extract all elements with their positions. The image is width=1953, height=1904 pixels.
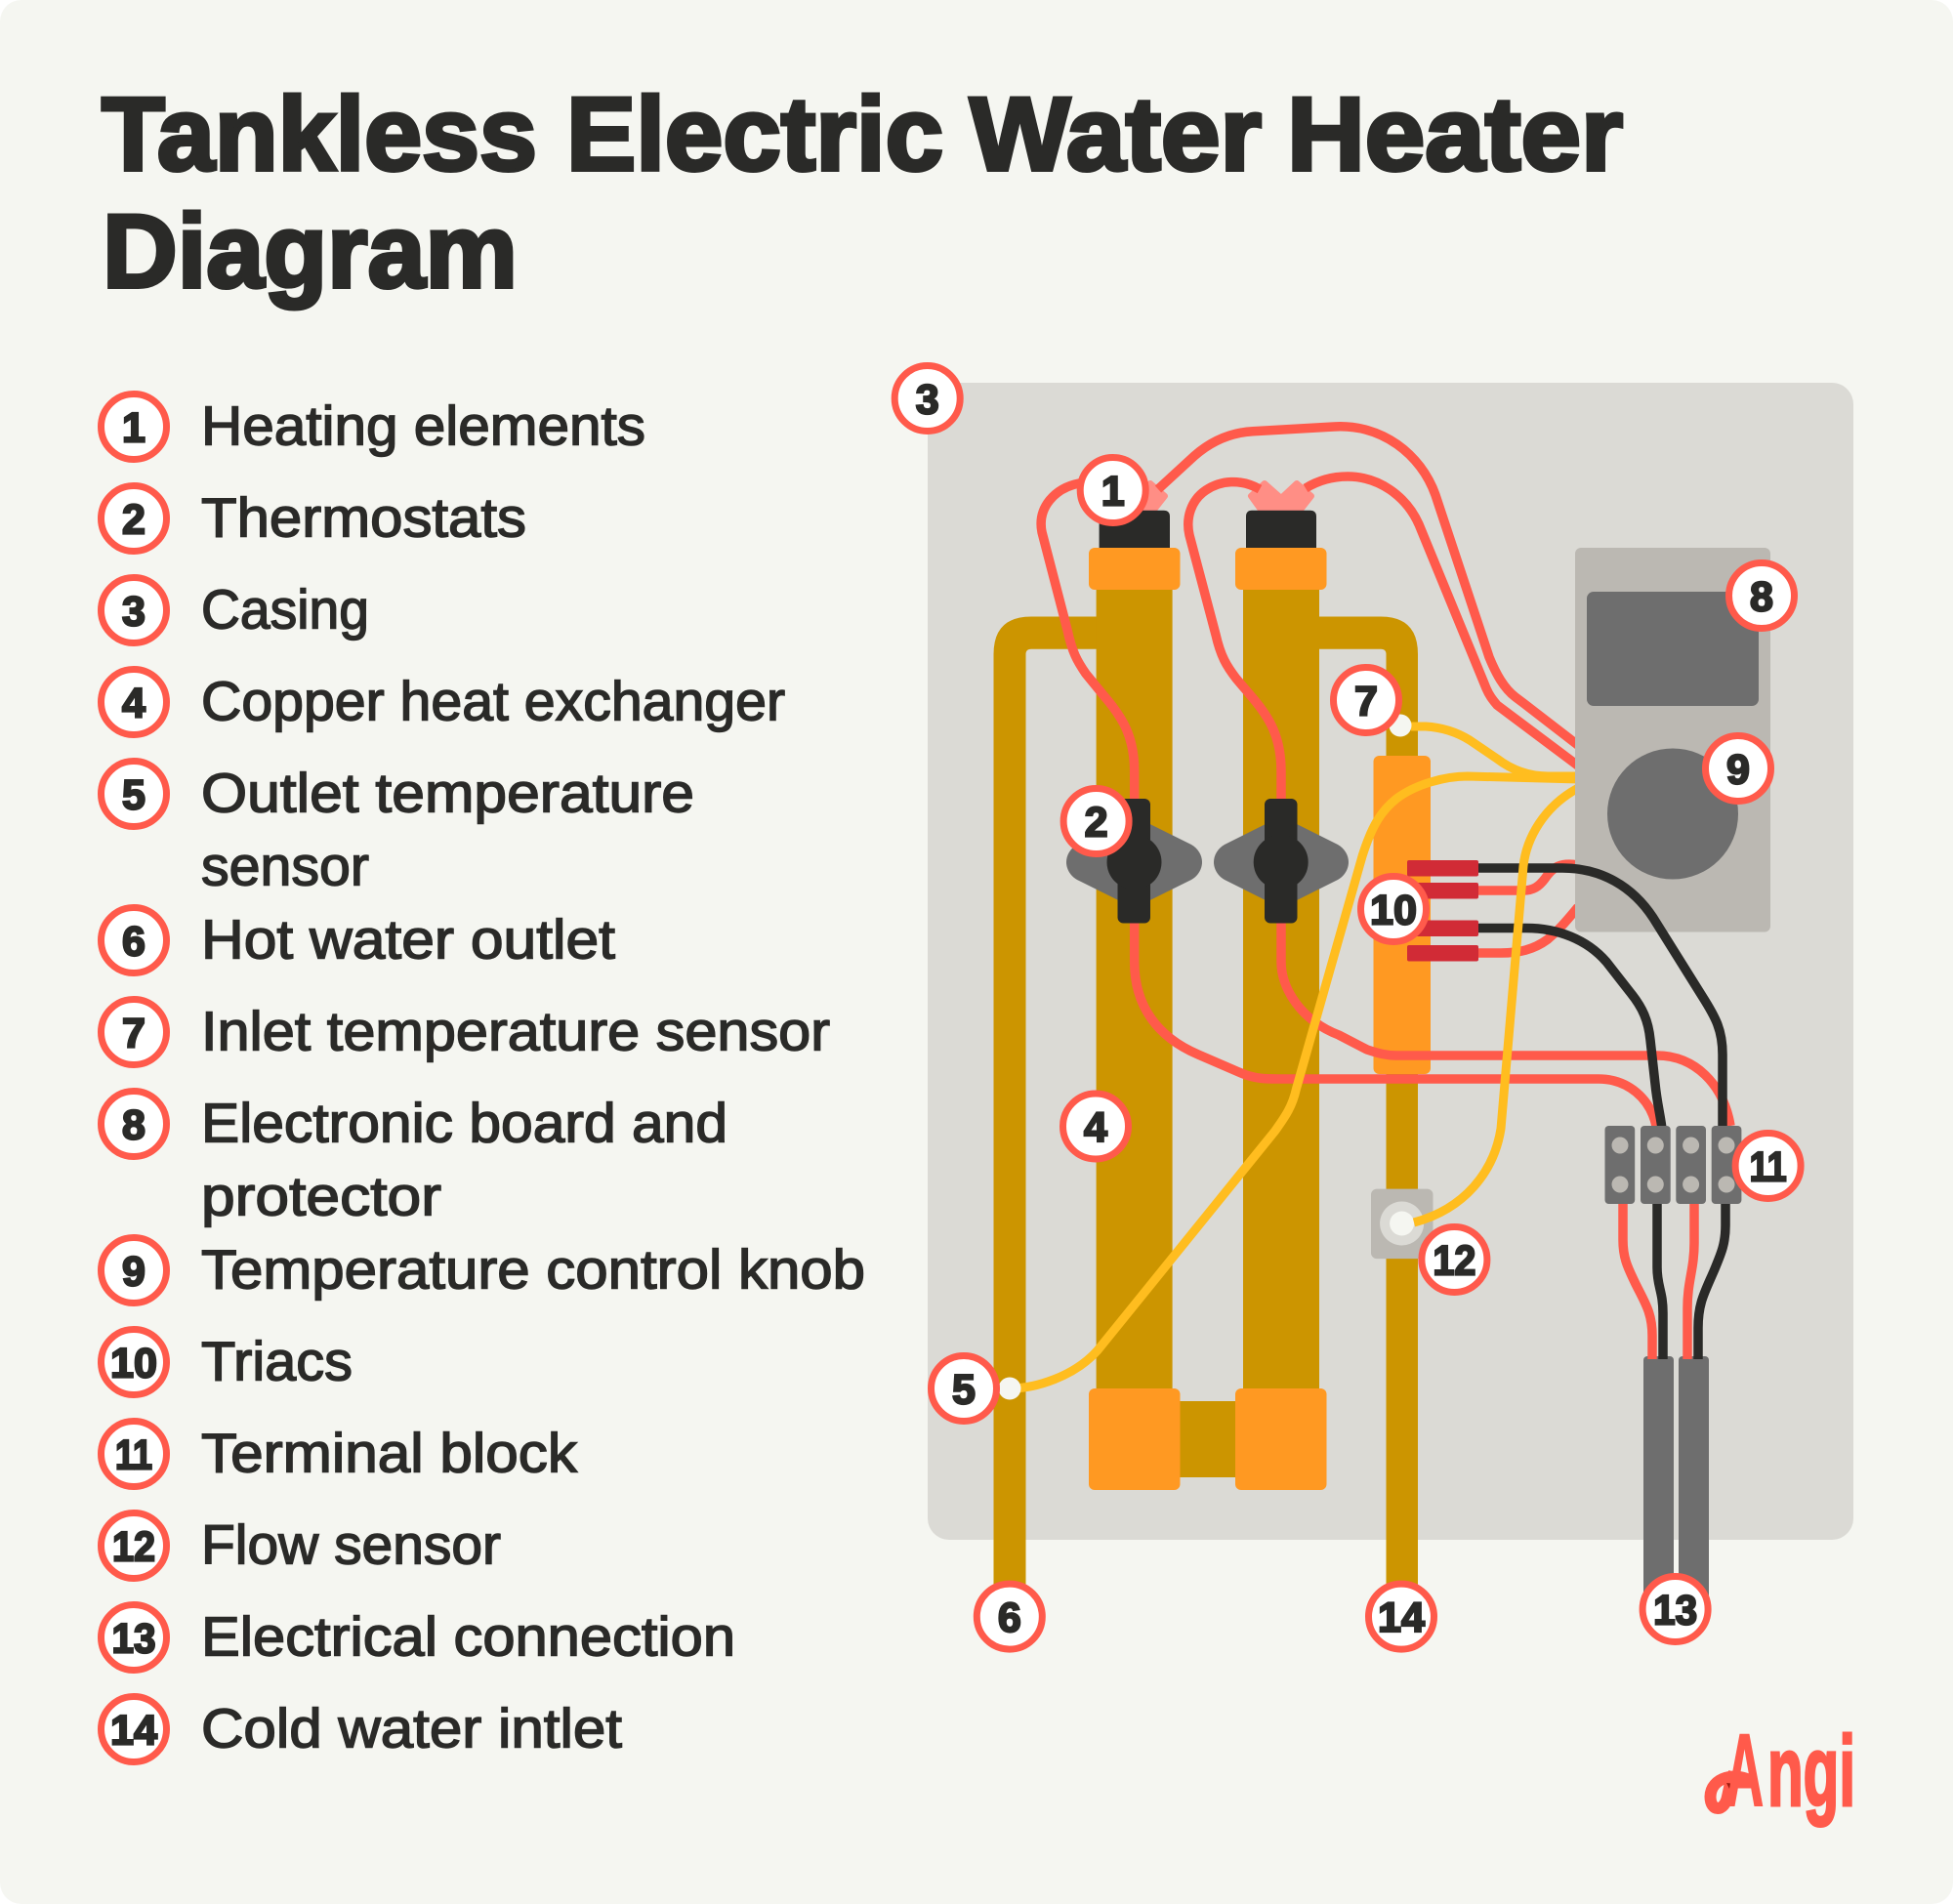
legend item 1: Heating elements xyxy=(201,394,645,457)
legend list xyxy=(102,394,865,1761)
legend item 13: 13 xyxy=(111,1615,156,1662)
triacs xyxy=(1407,860,1478,961)
callout 1 xyxy=(1080,457,1145,523)
legend item 4: 4 xyxy=(122,680,145,726)
legend item 5: Outlet temperature xyxy=(201,762,694,824)
title xyxy=(102,75,1623,310)
legend item 2: 2 xyxy=(122,496,145,543)
callout 2 xyxy=(1063,789,1129,853)
legend item 3: 3 xyxy=(122,588,145,635)
Angi logo xyxy=(1711,1714,1855,1828)
legend item 3: Casing xyxy=(201,578,369,641)
callout 2: 2 xyxy=(1085,799,1108,846)
flow block xyxy=(1373,756,1431,1074)
callout 10 xyxy=(1361,877,1426,941)
callout 11: 11 xyxy=(1750,1144,1787,1191)
thermostats xyxy=(1066,799,1349,924)
screen xyxy=(1587,592,1759,706)
legend item 10: 10 xyxy=(110,1340,157,1387)
legend item 8: protector xyxy=(201,1166,441,1228)
callout 7 xyxy=(1334,668,1398,732)
legend item 6: 6 xyxy=(122,918,145,965)
legend item 9: 9 xyxy=(122,1248,145,1295)
callout 8 xyxy=(1728,562,1795,629)
cold and hot water pipes xyxy=(994,617,1418,1617)
callout 5 xyxy=(932,1355,996,1422)
legend item 5: sensor xyxy=(201,836,369,898)
casing xyxy=(928,383,1853,1540)
outlet temperature sensor dot xyxy=(998,1377,1021,1400)
Angi logo: ngi xyxy=(1767,1716,1855,1827)
callout 3: 3 xyxy=(916,377,939,424)
callout 14: 14 xyxy=(1378,1594,1425,1641)
legend item 10 xyxy=(102,1330,353,1394)
legend item 8: 8 xyxy=(122,1101,145,1148)
callout 14 xyxy=(1369,1584,1434,1649)
callout 10: 10 xyxy=(1370,887,1417,933)
legend item 8: Electronic board and xyxy=(201,1092,727,1154)
temperature knob xyxy=(1607,748,1738,879)
legend item 2 xyxy=(102,486,526,551)
callout 12 xyxy=(1422,1226,1487,1293)
title: Diagram xyxy=(103,192,518,310)
legend item 7: Inlet temperature sensor xyxy=(201,1000,830,1062)
callout 4 xyxy=(1062,1094,1129,1159)
title: Tankless xyxy=(102,75,537,192)
yellow sensor wires xyxy=(1010,726,1582,1388)
legend item 11: Terminal block xyxy=(201,1422,578,1484)
callout 6: 6 xyxy=(998,1594,1021,1641)
legend item 14: Cold water intlet xyxy=(201,1697,622,1759)
legend item 10: Triacs xyxy=(201,1330,353,1392)
legend item 5 xyxy=(102,762,694,898)
callout 3 xyxy=(894,365,960,432)
callout 9: 9 xyxy=(1726,746,1750,793)
callout 5: 5 xyxy=(952,1367,976,1414)
heating elements xyxy=(1089,483,1326,1490)
callout 13: 13 xyxy=(1653,1588,1697,1635)
legend item 13: Electrical connection xyxy=(201,1605,735,1668)
callout 13 xyxy=(1642,1576,1708,1642)
legend item 6: Hot water outlet xyxy=(201,908,615,971)
legend item 8 xyxy=(102,1092,727,1228)
title: Heater xyxy=(1287,75,1623,192)
title: Electric xyxy=(566,75,943,192)
legend item 11: 11 xyxy=(115,1431,152,1478)
legend item 3 xyxy=(102,578,369,642)
callout 9 xyxy=(1705,736,1771,801)
electronic board xyxy=(1575,548,1770,931)
callout 8: 8 xyxy=(1750,574,1773,621)
flow sensor xyxy=(1371,1189,1434,1259)
black wires xyxy=(1477,868,1725,1359)
Angi logo: A xyxy=(1725,1714,1764,1828)
callout 4: 4 xyxy=(1084,1104,1107,1151)
inlet temperature sensor dot xyxy=(1389,715,1412,736)
legend item 9: Temperature control knob xyxy=(201,1238,865,1301)
legend item 14: 14 xyxy=(110,1707,157,1754)
legend item 7: 7 xyxy=(122,1010,145,1056)
legend item 2: Thermostats xyxy=(201,486,526,549)
callout 1: 1 xyxy=(1101,469,1125,516)
legend item 12: Flow sensor xyxy=(201,1513,501,1576)
legend item 4: Copper heat exchanger xyxy=(201,670,785,732)
red wires xyxy=(1041,427,1730,1359)
legend item 5: 5 xyxy=(122,771,145,818)
electrical cables xyxy=(1643,1356,1709,1612)
terminal block xyxy=(1605,1126,1741,1204)
callout 12: 12 xyxy=(1433,1238,1475,1285)
title: Water xyxy=(970,75,1262,192)
heater diagram xyxy=(894,365,1853,1649)
legend item 12: 12 xyxy=(112,1523,155,1570)
callout 11 xyxy=(1735,1133,1801,1199)
legend item 1: 1 xyxy=(122,404,145,451)
callout 7: 7 xyxy=(1354,678,1378,724)
callout 6 xyxy=(976,1584,1042,1649)
